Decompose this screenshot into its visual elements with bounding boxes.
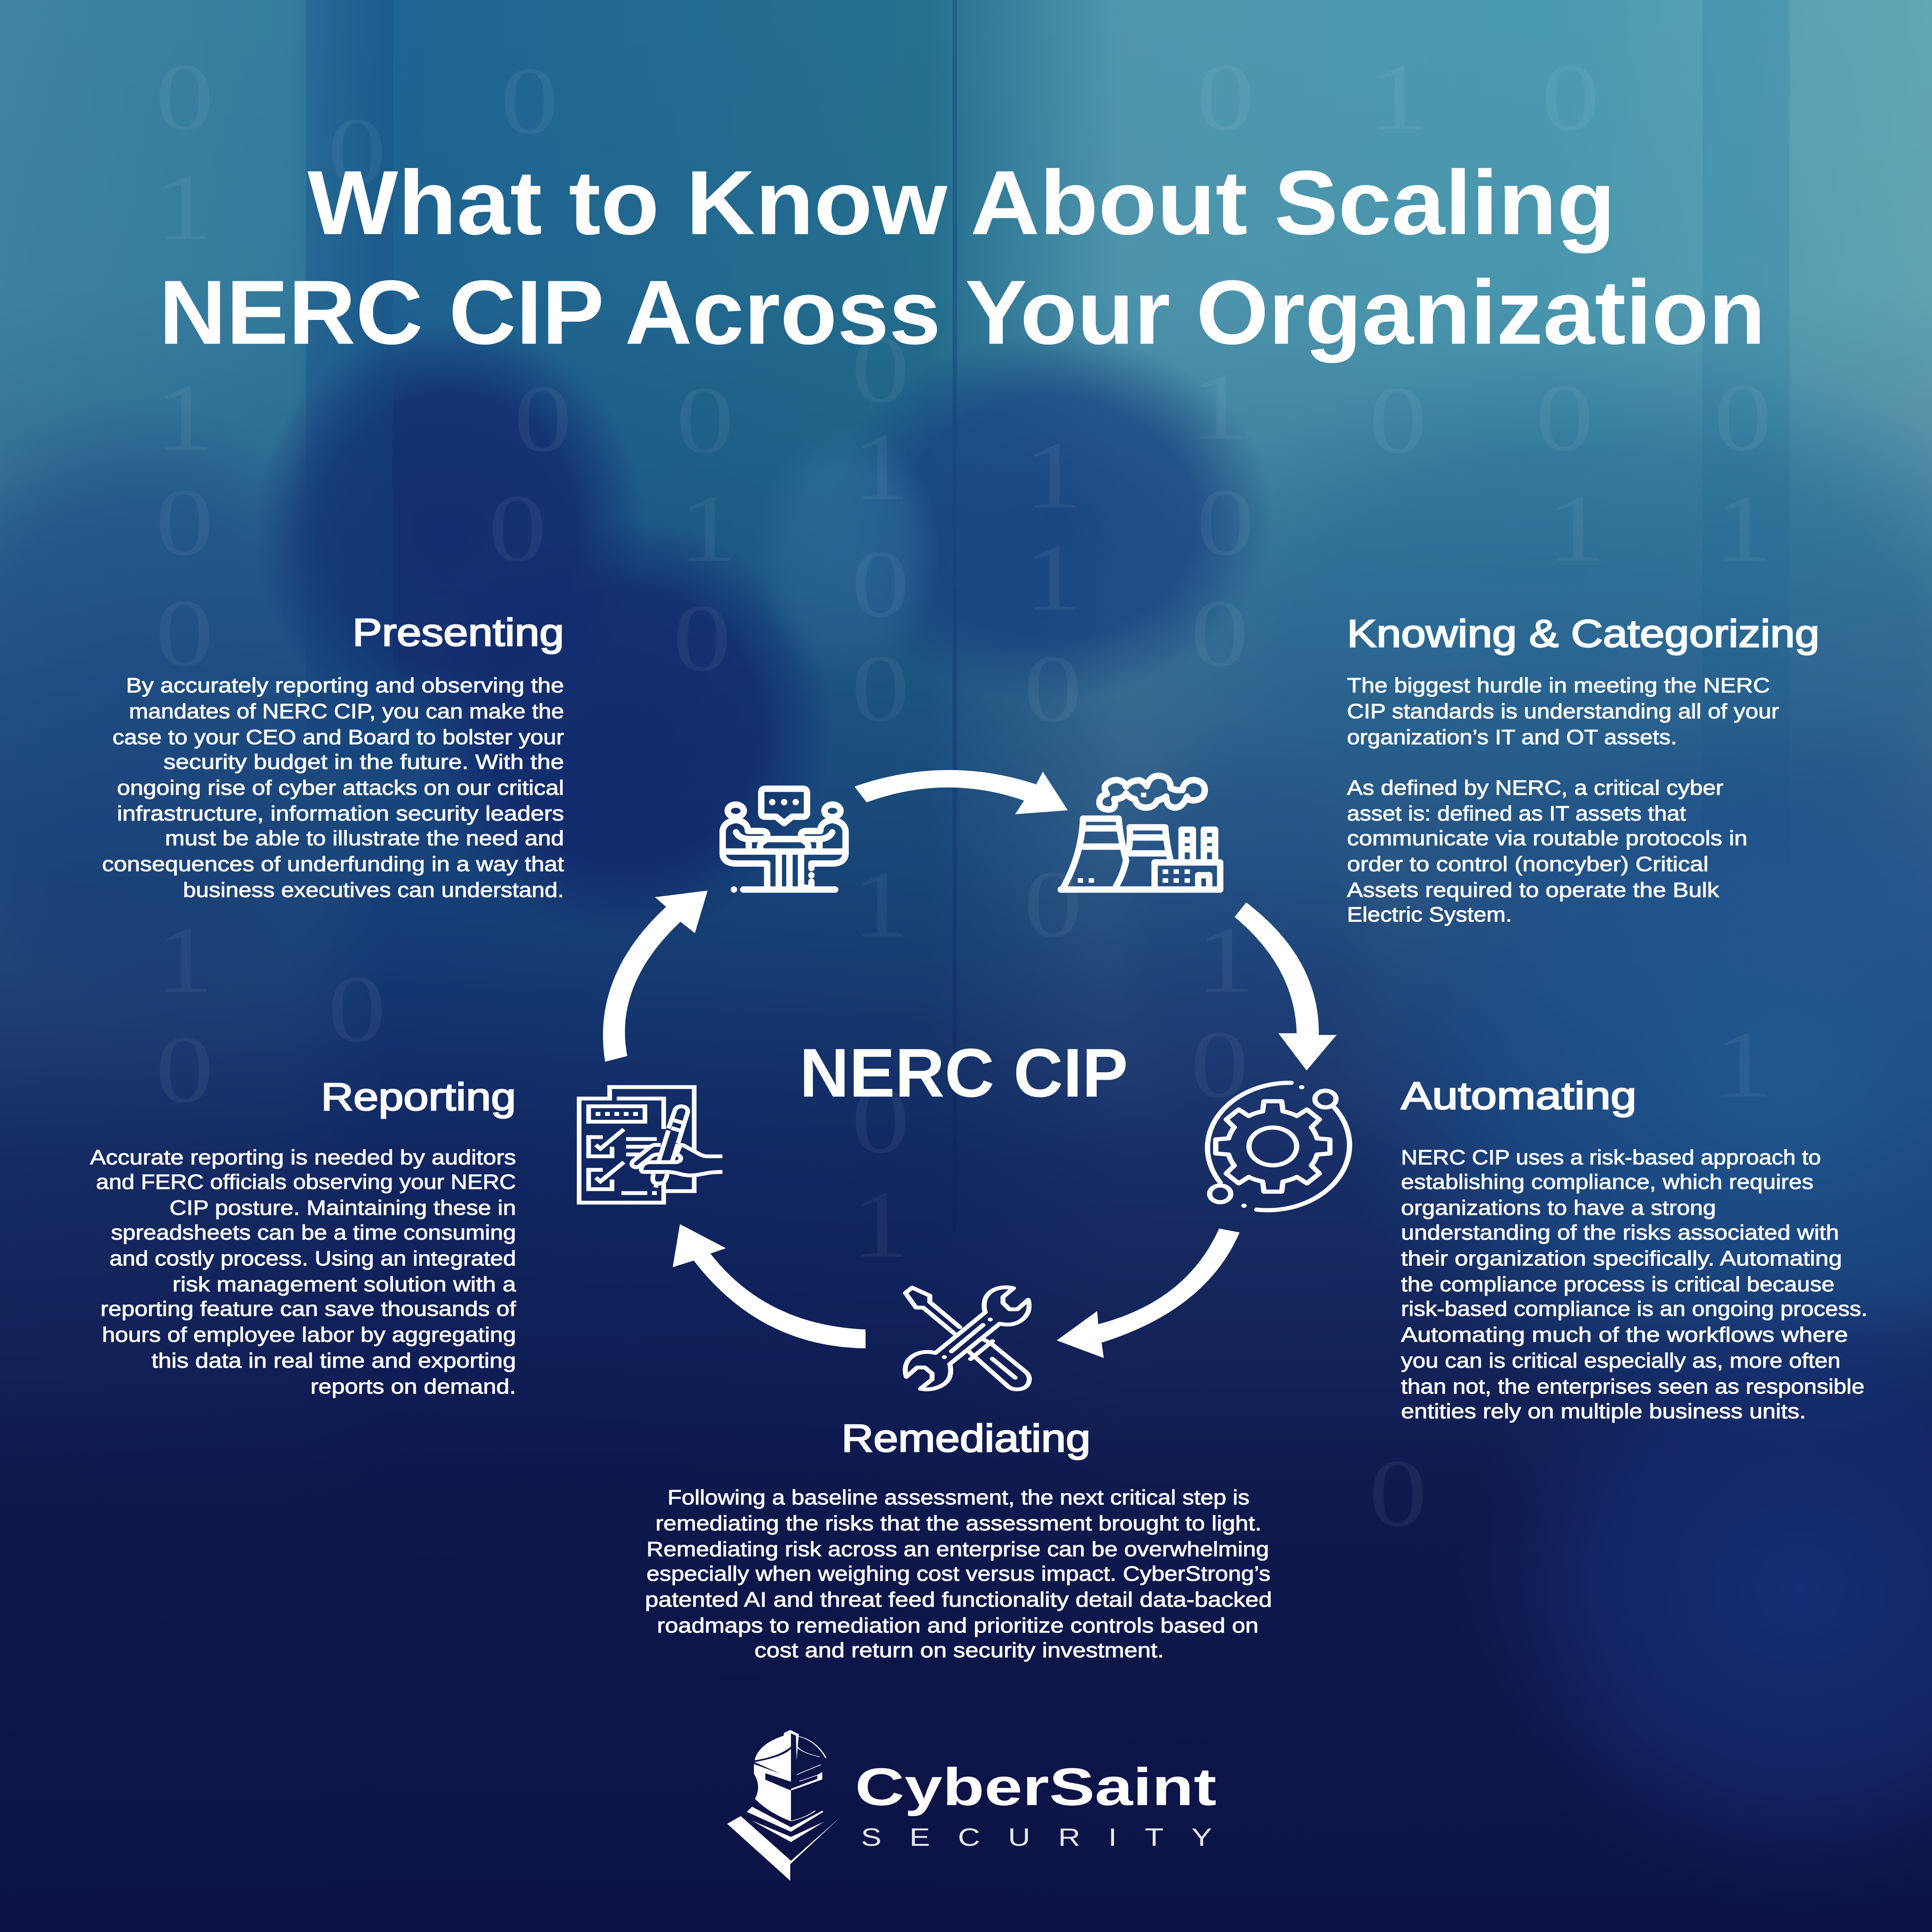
background: blue binary-code texture: 1 <box>1024 422 1082 529</box>
background: blue binary-code texture: 0 <box>1190 580 1249 686</box>
text block: automating: you can is critical especially as, more often <box>1401 1349 1840 1372</box>
text block: reporting: hours of employee labor by aggregating <box>102 1323 516 1346</box>
text block: knowing and categorizing: asset is: defined as IT assets that <box>1347 802 1686 825</box>
text block: automating <box>1401 1146 1867 1423</box>
arrows and gear <box>603 770 1350 1358</box>
text block: remediating: roadmaps to remediation and prioritize controls based on <box>657 1614 1259 1637</box>
text block: reporting <box>90 1146 516 1398</box>
arrow: presenting to knowing <box>854 770 1068 814</box>
text block: presenting: case to your CEO and Board to bolster your <box>112 726 564 749</box>
text block: reporting: and costly process. Using an integrated <box>109 1247 516 1270</box>
arrow: remediating to reporting <box>673 1224 866 1348</box>
background: blue binary-code texture: 0 <box>676 367 734 473</box>
background: blue binary-code texture: 1 <box>155 906 214 1013</box>
icon: reporting clipboard <box>579 1087 723 1202</box>
text block: reporting: CIP posture. Maintaining these in <box>170 1196 516 1219</box>
background: blue binary-code texture: 0 <box>155 44 214 150</box>
background: blue binary-code texture: 1 <box>679 475 737 582</box>
text block: reporting: and FERC officials observing your NERC <box>96 1170 516 1194</box>
text block: remediating: Following a baseline assessment, the next critical step is <box>667 1486 1250 1509</box>
background: blue binary-code texture: 1 <box>851 413 910 520</box>
panel: automating <box>1401 1074 1867 1423</box>
text block: presenting: consequences of underfunding in a way that <box>102 852 564 876</box>
background: blue binary-code texture: 0 <box>488 475 547 582</box>
text block: knowing and categorizing: Electric System. <box>1347 903 1512 926</box>
arrow: knowing to automating <box>1235 902 1337 1071</box>
background: blue binary-code texture: 0 <box>1714 364 1772 471</box>
background: blue binary-code texture: 1 <box>155 364 214 471</box>
text block: knowing and categorizing <box>1347 674 1779 926</box>
icon: wrench and screwdriver <box>905 1287 1029 1389</box>
arrow: automating to remediating <box>1057 1228 1240 1358</box>
background: blue binary-code texture: 1 <box>1190 353 1249 459</box>
cycle diagram <box>579 770 1350 1389</box>
background: blue binary-code texture: 0 <box>1196 44 1255 150</box>
background: blue binary-code texture: 0 <box>514 365 572 472</box>
background: blue binary-code texture: 0 <box>155 580 214 686</box>
background: blue binary-code texture: 1 <box>851 1171 910 1277</box>
background: blue binary-code texture: 1 <box>1369 44 1427 150</box>
background: blue binary-code texture: 0 <box>673 585 731 691</box>
text block: automating: entities rely on multiple business units. <box>1401 1400 1806 1423</box>
text block: reporting: this data in real time and exporting <box>151 1349 516 1372</box>
panel: knowing and categorizing <box>1347 612 1820 926</box>
text block: reporting: Accurate reporting is needed by auditors <box>90 1146 516 1169</box>
background: blue binary-code texture: 1 <box>1196 906 1255 1013</box>
background: blue binary-code texture: 1 <box>1714 475 1772 582</box>
icon: gear <box>1208 1083 1350 1210</box>
text block: automating: risk-based compliance is an ongoing process. <box>1401 1297 1867 1320</box>
text block: presenting: infrastructure, information security leaders <box>117 802 564 825</box>
text block: automating: organizations to have a strong <box>1401 1196 1716 1219</box>
background: blue binary-code texture: 0 <box>851 1066 910 1173</box>
heading: presenting: Presenting <box>352 611 564 654</box>
text block: knowing and categorizing: organization’s IT and OT assets. <box>1347 726 1677 749</box>
text block: automating: than not, the enterprises seen as responsible <box>1401 1375 1864 1398</box>
text block: automating: understanding of the risks associated with <box>1401 1221 1839 1244</box>
background: blue binary-code texture: 1 <box>1714 1011 1772 1117</box>
text block: automating: Automating much of the workflows where <box>1401 1323 1848 1346</box>
text block: knowing and categorizing: Assets required to operate the Bulk <box>1347 878 1719 901</box>
text block: reporting: risk management solution with a <box>172 1272 516 1296</box>
background: blue binary-code texture: 0 <box>500 48 559 154</box>
background: blue binary-code texture: 0 <box>1024 635 1082 742</box>
heading: remediating: Remediating <box>842 1417 1090 1460</box>
text block: knowing and categorizing: The biggest hurdle in meeting the NERC <box>1347 674 1770 697</box>
text block: remediating: especially when weighing cost versus impact. CyberStrong’s <box>646 1562 1270 1585</box>
text block: reporting: reports on demand. <box>311 1375 516 1398</box>
text block: presenting: ongoing rise of cyber attacks on our critical <box>117 776 564 799</box>
title <box>159 151 1765 364</box>
background: blue binary-code texture: 1 <box>1024 524 1082 631</box>
background: blue binary-code texture: 0 <box>1196 469 1255 575</box>
logo wordmark: CyberSaint <box>855 1758 1216 1816</box>
text block: presenting: security budget in the future. With the <box>163 750 564 773</box>
text block: knowing and categorizing: As defined by NERC, a critical cyber <box>1347 776 1723 799</box>
text block: automating: NERC CIP uses a risk-based approach to <box>1401 1146 1821 1169</box>
text block: knowing and categorizing: communicate via routable protocols in <box>1347 827 1748 850</box>
title: What to Know About Scaling <box>308 151 1616 254</box>
text block: remediating <box>645 1486 1272 1662</box>
icon: meeting <box>723 789 845 889</box>
center label: NERC CIP: NERC CIP <box>799 1034 1128 1112</box>
logo icon: knight helmet <box>727 1730 841 1881</box>
background: blue binary-code texture: 0 <box>851 531 910 637</box>
text block: presenting: By accurately reporting and observing the <box>126 674 564 697</box>
text block: knowing and categorizing: CIP standards is understanding all of your <box>1347 700 1779 723</box>
background: blue binary-code texture: 1 <box>851 851 910 957</box>
text block: automating: establishing compliance, which requires <box>1401 1170 1813 1194</box>
icon: power plant <box>1061 776 1220 889</box>
text block: remediating: cost and return on security investment. <box>755 1638 1164 1662</box>
text block: presenting: mandates of NERC CIP, you can make the <box>129 700 564 723</box>
background: blue binary-code texture: 1 <box>1547 475 1606 582</box>
background: blue binary-code texture: 0 <box>1369 1440 1427 1546</box>
background: blue binary-code texture: 0 <box>851 316 910 422</box>
background: blue binary-code texture: 0 <box>328 956 386 1062</box>
text block: presenting <box>102 674 564 901</box>
panel: presenting <box>102 611 564 901</box>
background: blue binary-code texture: 0 <box>328 98 386 204</box>
text block: remediating: patented AI and threat feed functionality detail data-backed <box>645 1588 1272 1611</box>
text block: reporting: spreadsheets can be a time consuming <box>111 1221 516 1244</box>
logo: CyberSaint Security <box>727 1730 1216 1881</box>
background: blue binary-code texture: 0 <box>1190 1011 1249 1117</box>
heading: knowing and categorizing: Knowing & Categorizing <box>1347 612 1820 655</box>
text block: automating: the compliance process is critical because <box>1401 1272 1835 1296</box>
text block: automating: their organization specifically. Automating <box>1401 1247 1842 1270</box>
background: blue binary-code texture: 0 <box>155 469 214 575</box>
panel: remediating <box>645 1417 1272 1662</box>
background: blue binary-code texture: 1 <box>155 153 214 260</box>
text block: remediating: Remediating risk across an enterprise can be overwhelming <box>646 1537 1269 1561</box>
background: blue binary-code texture: 0 <box>1535 364 1594 471</box>
logo subtitle: SECURITY <box>861 1823 1212 1851</box>
text block: reporting: reporting feature can save thousands of <box>100 1297 516 1320</box>
heading: automating: Automating <box>1401 1074 1636 1117</box>
background: blue binary-code texture: 0 <box>1541 44 1600 150</box>
panel: reporting <box>90 1075 516 1398</box>
background: blue binary-code texture: 0 <box>1024 851 1082 957</box>
text block: knowing and categorizing: order to control (noncyber) Critical <box>1347 852 1709 876</box>
text block: remediating: remediating the risks that the assessment brought to light. <box>655 1512 1262 1535</box>
background: blue binary-code texture: 0 <box>851 635 910 742</box>
background: blue binary-code texture: 0 <box>155 1016 214 1122</box>
heading: reporting: Reporting <box>321 1075 516 1119</box>
text block: presenting: business executives can understand. <box>183 878 564 901</box>
background: blue binary-code texture: 0 <box>1369 367 1427 473</box>
arrow: reporting to presenting <box>603 891 707 1062</box>
text block: presenting: must be able to illustrate the need and <box>165 827 564 850</box>
